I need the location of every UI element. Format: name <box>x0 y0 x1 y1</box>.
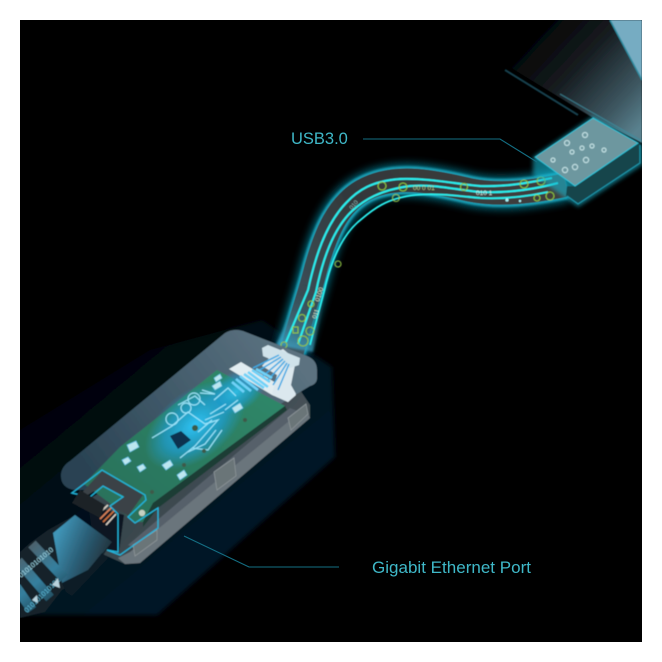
Gigabit Ethernet Port leader line <box>184 536 339 567</box>
USB plug <box>533 116 642 207</box>
USB3.0 cable: 010 1 <box>476 190 493 197</box>
Gigabit Ethernet Port label: Gigabit Ethernet Port <box>372 559 531 577</box>
USB3.0 cable <box>276 177 566 352</box>
ethernet cable plug: 010101010101 <box>24 577 62 614</box>
housing lower body <box>92 392 311 565</box>
navy glow volume behind adapter <box>10 320 335 615</box>
laptop edge with USB port <box>504 20 642 144</box>
USB3.0 leader line <box>363 139 537 162</box>
chip <box>170 431 191 449</box>
USB3.0 cable: 0100 <box>314 286 325 303</box>
USB3.0 cable: 00 0 01 <box>413 185 435 192</box>
Gigabit Ethernet Port callout <box>184 536 531 577</box>
USB3.0 cable: 011 <box>312 308 321 320</box>
USB3.0 label: USB3.0 <box>291 130 348 148</box>
circuit traces and components <box>152 388 238 458</box>
adapter housing <box>61 330 317 564</box>
ribbon connector <box>229 345 300 402</box>
translucent lid <box>61 330 317 490</box>
USB3.0 callout <box>291 130 537 162</box>
ethernet cable plug <box>16 515 112 618</box>
housing clips <box>133 404 308 556</box>
circuit board <box>84 359 287 527</box>
ethernet cable plug: 01010101010 <box>18 547 55 580</box>
USB3.0 cable: 010 <box>349 199 360 211</box>
RJ45 port frame <box>72 470 158 555</box>
data glyphs on cable <box>281 177 554 348</box>
